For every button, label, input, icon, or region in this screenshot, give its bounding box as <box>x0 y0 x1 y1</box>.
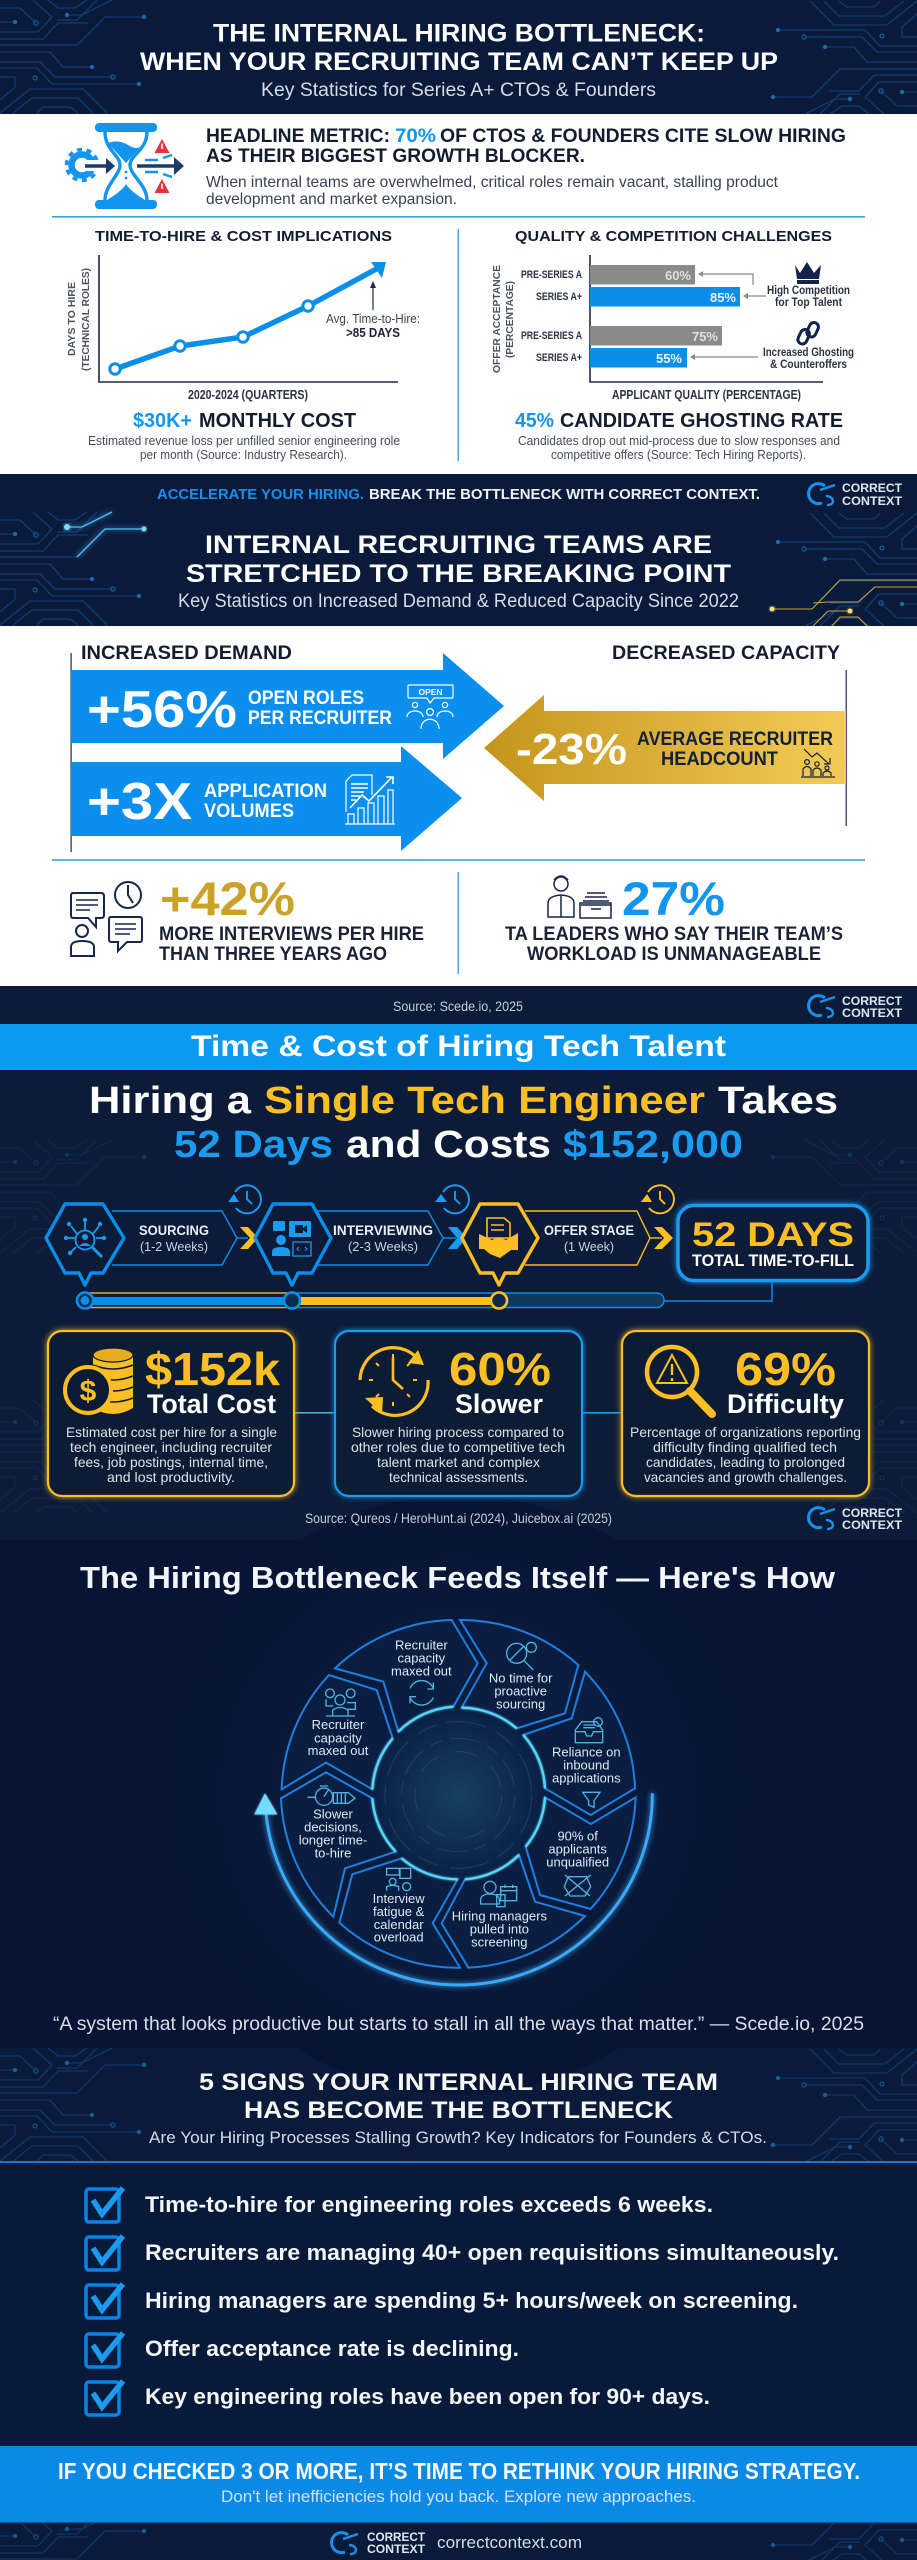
stat: ghosting rate: CANDIDATE GHOSTING RATE <box>560 410 843 432</box>
segment labels: inbound <box>563 1758 609 1773</box>
source note with logo: Source: Qureos / HeroHunt.ai (2024), Juicebox.ai (2025) <box>305 1510 612 1526</box>
arrow: open roles per recruiter <box>71 653 504 759</box>
segment labels: pulled into <box>470 1921 529 1936</box>
stat label: THAN THREE YEARS AGO <box>159 944 387 965</box>
logo: CONTEXT <box>842 494 903 508</box>
checklist item: Key engineering roles have been open for 90+ days. <box>145 2384 710 2409</box>
checklist item <box>86 2236 839 2270</box>
stat label <box>159 924 424 965</box>
segment icons <box>307 1642 603 1907</box>
icon: broken chain <box>796 321 820 345</box>
source note with logo: CONTEXT <box>842 1006 903 1020</box>
bar chart: 60% <box>665 268 691 283</box>
text block: tech engineer, including recruiter <box>70 1439 272 1455</box>
subtitle: Are Your Hiring Processes Stalling Growth? Key Indicators for Founders & CTOs. <box>149 2128 767 2147</box>
title: STRETCHED TO THE BREAKING POINT <box>186 560 731 588</box>
panel: five signs header <box>0 2048 917 2163</box>
footer: CORRECT <box>367 2530 426 2544</box>
stat label: WORKLOAD IS UNMANAGEABLE <box>527 944 821 965</box>
checklist item: Hiring managers are spending 5+ hours/week on screening. <box>145 2288 798 2313</box>
central hub <box>372 1709 545 1881</box>
checklist item: Time-to-hire for engineering roles exceeds 6 weeks. <box>145 2192 713 2217</box>
segment labels: fatigue & <box>373 1904 425 1919</box>
source note with logo <box>393 994 903 1020</box>
segment labels: maxed out <box>308 1743 369 1758</box>
panel: call to action <box>0 2446 917 2522</box>
callout: high competition <box>767 283 850 309</box>
arrow: application volumes: APPLICATION <box>204 781 327 802</box>
line chart: (TECHNICAL ROLES) <box>80 268 92 371</box>
callout: ghosting <box>763 345 854 371</box>
title: 5 SIGNS YOUR INTERNAL HIRING TEAM <box>199 2069 718 2096</box>
checklist item: Offer acceptance rate is declining. <box>145 2336 519 2361</box>
subtitle: Key Statistics for Series A+ CTOs & Founders <box>261 80 656 101</box>
icon: magnifier with warning <box>647 1347 712 1414</box>
segment labels: overload <box>374 1930 424 1945</box>
source note with logo: CORRECT <box>842 1506 903 1520</box>
heading: HEADLINE METRIC: <box>206 125 390 147</box>
callout: ghosting: Increased Ghosting <box>763 345 854 359</box>
panel: time-to-hire and cost <box>66 228 420 462</box>
segment labels: Reliance on <box>552 1745 621 1760</box>
text block: other roles due to competitive tech <box>351 1439 565 1455</box>
stat: monthly cost: MONTHLY COST <box>199 410 356 432</box>
text block: technical assessments. <box>389 1469 528 1485</box>
segment labels: applicants <box>548 1842 607 1857</box>
text block: Don't let inefficiencies hold you back. Explore new approaches. <box>221 2487 696 2506</box>
title: single tech engineer: $152,000 <box>563 1124 743 1166</box>
heading: QUALITY & COMPETITION CHALLENGES <box>515 228 832 245</box>
card: total cost: Total Cost <box>147 1389 276 1419</box>
stat value: +42% <box>160 872 295 925</box>
bar chart <box>491 255 823 402</box>
icon: open roles <box>407 685 453 729</box>
line chart: 2020-2024 (QUARTERS) <box>188 388 308 402</box>
heading <box>206 125 846 167</box>
segment labels: Recruiter <box>395 1638 448 1653</box>
footer: correctcontext.com <box>437 2533 582 2552</box>
callout: ghosting: & Counteroffers <box>770 357 847 371</box>
step: offer stage: OFFER STAGE <box>544 1223 634 1238</box>
text block: description: development and market expansion. <box>206 191 457 208</box>
line chart: >85 DAYS <box>346 326 400 340</box>
bar chart: 55% <box>656 351 682 366</box>
text block: description <box>206 174 779 208</box>
arrow: open roles per recruiter: PER RECRUITER <box>248 708 392 729</box>
line chart <box>66 255 420 402</box>
card: difficulty: Difficulty <box>727 1389 844 1419</box>
logo <box>809 481 903 508</box>
checklist item: Recruiters are managing 40+ open requisitions simultaneously. <box>145 2240 839 2265</box>
bar chart: 85% <box>710 290 736 305</box>
card: total cost: $152k <box>145 1343 280 1395</box>
timeline bar <box>77 1281 772 1309</box>
arrow: application volumes: VOLUMES <box>204 801 294 822</box>
title: INTERNAL RECRUITING TEAMS ARE <box>205 531 712 559</box>
step: sourcing: (1-2 Weeks) <box>140 1239 208 1254</box>
text block <box>351 1424 565 1485</box>
text block <box>66 1424 277 1485</box>
footer <box>0 2523 917 2560</box>
card: total cost <box>48 1331 294 1496</box>
title: single tech engineer: and Costs <box>346 1124 551 1166</box>
arrow: open roles per recruiter: +56% <box>87 681 237 739</box>
checklist item <box>86 2284 798 2318</box>
source note with logo: Source: Scede.io, 2025 <box>393 998 523 1014</box>
text block: difficulty finding qualified tech <box>653 1439 837 1455</box>
text block: fees, job postings, internal time, <box>74 1454 268 1470</box>
text block: Estimated cost per hire for a single <box>66 1424 277 1440</box>
segment labels: No time for <box>489 1671 553 1686</box>
panel: checklist <box>86 2188 839 2415</box>
stat: monthly cost: $30K+ <box>133 410 192 432</box>
title <box>140 20 778 76</box>
diagram: bottleneck cycle <box>254 1620 652 1985</box>
text block <box>630 1424 861 1485</box>
step: interviewing <box>255 1185 469 1285</box>
segment labels: sourcing <box>496 1697 545 1712</box>
step: interviewing: INTERVIEWING <box>333 1223 433 1238</box>
bar chart: APPLICANT QUALITY (PERCENTAGE) <box>612 388 801 402</box>
text block: Candidates drop out mid-process due to slow responses and <box>518 433 840 448</box>
card: difficulty <box>622 1331 869 1496</box>
text block <box>157 487 760 503</box>
checklist item <box>86 2188 713 2222</box>
step: offer stage: (1 Week) <box>564 1239 614 1254</box>
source note with logo: CONTEXT <box>842 1518 903 1532</box>
step: offer stage <box>462 1185 674 1285</box>
bar chart: PRE-SERIES A <box>521 330 582 342</box>
card: slower: Slower <box>455 1389 543 1419</box>
title: WHEN YOUR RECRUITING TEAM CAN’T KEEP UP <box>140 48 778 76</box>
icon: clock <box>360 1348 428 1415</box>
icon: document and growth chart <box>345 775 395 824</box>
title <box>199 2069 718 2124</box>
title: single tech engineer: 52 Days <box>174 1124 333 1166</box>
card: slower: 60% <box>449 1343 551 1395</box>
arrow: recruiter headcount: -23% <box>516 725 627 774</box>
icon: shrinking headcount <box>801 749 835 777</box>
text block: ACCELERATE YOUR HIRING. <box>157 487 364 503</box>
source note with logo <box>305 1506 903 1532</box>
heading: TIME-TO-HIRE & COST IMPLICATIONS <box>95 228 392 245</box>
text block: description: When internal teams are overwhelmed, critical roles remain vacant, stalling product <box>206 174 779 191</box>
segment labels: decisions, <box>304 1820 362 1835</box>
icon: conversations and clock <box>71 882 142 956</box>
icon: stressed worker with files <box>548 876 611 918</box>
card: difficulty: 69% <box>735 1343 836 1395</box>
panel: quality and competition <box>491 228 854 462</box>
heading: 70% <box>395 125 436 147</box>
segment labels: Hiring managers <box>452 1908 547 1923</box>
title: HAS BECOME THE BOTTLENECK <box>244 2097 674 2124</box>
text block: per month (Source: Industry Research). <box>140 447 347 462</box>
segment labels: Slower <box>313 1807 354 1822</box>
stat label <box>505 924 843 965</box>
stat label: MORE INTERVIEWS PER HIRE <box>159 924 424 945</box>
icon: hourglass with gear <box>66 123 184 209</box>
arrow: recruiter headcount: HEADCOUNT <box>661 749 778 770</box>
segment labels <box>299 1638 621 1949</box>
title: single tech engineer: Hiring a <box>89 1080 252 1122</box>
panel: demand vs capacity <box>70 643 847 852</box>
callout: total time to fill: 52 DAYS <box>692 1216 854 1254</box>
line chart: DAYS TO HIRE <box>66 282 78 356</box>
arrow: application volumes: +3X <box>87 773 192 831</box>
bar chart: (PERCENTAGE) <box>504 281 516 358</box>
step: interviewing: (2-3 Weeks) <box>348 1239 418 1254</box>
panel: hiring process <box>46 1185 868 1309</box>
panel: more interviews stat <box>71 872 424 965</box>
bar chart: OFFER ACCEPTANCE <box>491 265 503 373</box>
bar chart: SERIES A+ <box>536 352 582 364</box>
subtitle: Key Statistics on Increased Demand & Reduced Capacity Since 2022 <box>178 591 739 612</box>
segment labels: applications <box>552 1770 621 1785</box>
icon: crown <box>795 262 821 284</box>
text block: and lost productivity. <box>107 1469 235 1485</box>
bar chart: SERIES A+ <box>536 291 582 303</box>
stat label: TA LEADERS WHO SAY THEIR TEAM’S <box>505 924 843 945</box>
arrow: open roles per recruiter: OPEN ROLES <box>248 688 364 709</box>
segment labels: Interview <box>373 1891 425 1906</box>
arrow: recruiter headcount <box>484 695 846 801</box>
icon: coins <box>65 1348 133 1414</box>
title <box>186 531 731 588</box>
panel: headline metric <box>66 123 846 209</box>
text block <box>518 433 840 462</box>
segment labels: maxed out <box>391 1664 452 1679</box>
bar chart: 75% <box>692 329 718 344</box>
panel: call to action banner <box>157 481 903 508</box>
callout: high competition: for Top Talent <box>775 295 842 309</box>
heading: AS THEIR BIGGEST GROWTH BLOCKER. <box>206 145 585 167</box>
title: single tech engineer: Single Tech Engineer <box>264 1080 705 1122</box>
segment labels: longer time- <box>299 1833 367 1848</box>
icon: clock <box>228 1185 261 1213</box>
arrow: application volumes <box>71 746 462 851</box>
step: sourcing <box>46 1185 261 1285</box>
stat: ghosting rate: 45% <box>515 410 554 432</box>
stat value: 27% <box>622 872 725 925</box>
footer: CONTEXT <box>367 2542 426 2556</box>
segment labels: unqualified <box>546 1854 609 1869</box>
quote: “A system that looks productive but starts to stall in all the ways that matter.” — Scede.io, 2025 <box>53 2013 864 2035</box>
source note with logo: CORRECT <box>842 994 903 1008</box>
card: slower <box>335 1331 582 1496</box>
title: single tech engineer <box>89 1080 838 1166</box>
text block: Percentage of organizations reporting <box>630 1424 861 1440</box>
arrow: recruiter headcount: AVERAGE RECRUITER <box>637 729 833 750</box>
logo: CORRECT <box>842 481 903 495</box>
segment labels: 90% of <box>557 1829 598 1844</box>
title: single tech engineer: Takes <box>718 1080 838 1122</box>
text block <box>88 433 400 462</box>
side circuit decoration <box>0 1140 917 1513</box>
icon: clock <box>641 1185 674 1213</box>
heading: decreased capacity: DECREASED CAPACITY <box>612 643 840 664</box>
text block: BREAK THE BOTTLENECK WITH CORRECT CONTEXT. <box>369 487 760 503</box>
title: THE INTERNAL HIRING BOTTLENECK: <box>213 20 705 48</box>
text block: vacancies and growth challenges. <box>644 1469 847 1485</box>
segment labels: to-hire <box>315 1845 351 1860</box>
icon: clock <box>435 1185 469 1213</box>
checklist item <box>86 2333 519 2367</box>
text block: talent market and complex <box>377 1454 540 1470</box>
callout: total time to fill <box>678 1206 868 1280</box>
heading: increased demand: INCREASED DEMAND <box>81 643 292 664</box>
panel: top header <box>0 0 917 114</box>
segment labels: proactive <box>494 1684 547 1699</box>
icon: coins: $ <box>80 1375 97 1408</box>
segment labels: capacity <box>398 1651 446 1666</box>
line chart: Avg. Time-to-Hire: <box>326 312 420 326</box>
loop arrow <box>254 1793 652 1985</box>
panel: recruiting teams header <box>0 512 917 626</box>
checklist item <box>86 2381 710 2415</box>
panel: unmanageable workload stat <box>505 872 843 965</box>
icon: open roles: OPEN <box>418 687 443 697</box>
text block: competitive offers (Source: Tech Hiring Reports). <box>551 447 806 462</box>
cycle segments <box>281 1620 636 1968</box>
segment labels: screening <box>471 1934 527 1949</box>
title: bottleneck loop: The Hiring Bottleneck Feeds Itself — Here's How <box>80 1560 836 1595</box>
segment labels: capacity <box>314 1730 362 1745</box>
panel: time and cost band <box>0 1024 917 1070</box>
step: sourcing: SOURCING <box>139 1223 209 1238</box>
bar chart: PRE-SERIES A <box>521 269 582 281</box>
text block: Slower hiring process compared to <box>352 1424 564 1440</box>
callout: high competition: High Competition <box>767 283 850 297</box>
heading: Time & Cost of Hiring Tech Talent <box>191 1030 726 1063</box>
callout: total time to fill: TOTAL TIME-TO-FILL <box>692 1251 854 1270</box>
segment labels: Recruiter <box>312 1717 365 1732</box>
heading: OF CTOS & FOUNDERS CITE SLOW HIRING <box>440 125 846 147</box>
segment labels: calendar <box>374 1917 424 1932</box>
text block: Estimated revenue loss per unfilled senior engineering role <box>88 433 400 448</box>
text block: candidates, leading to prolonged <box>646 1454 845 1470</box>
